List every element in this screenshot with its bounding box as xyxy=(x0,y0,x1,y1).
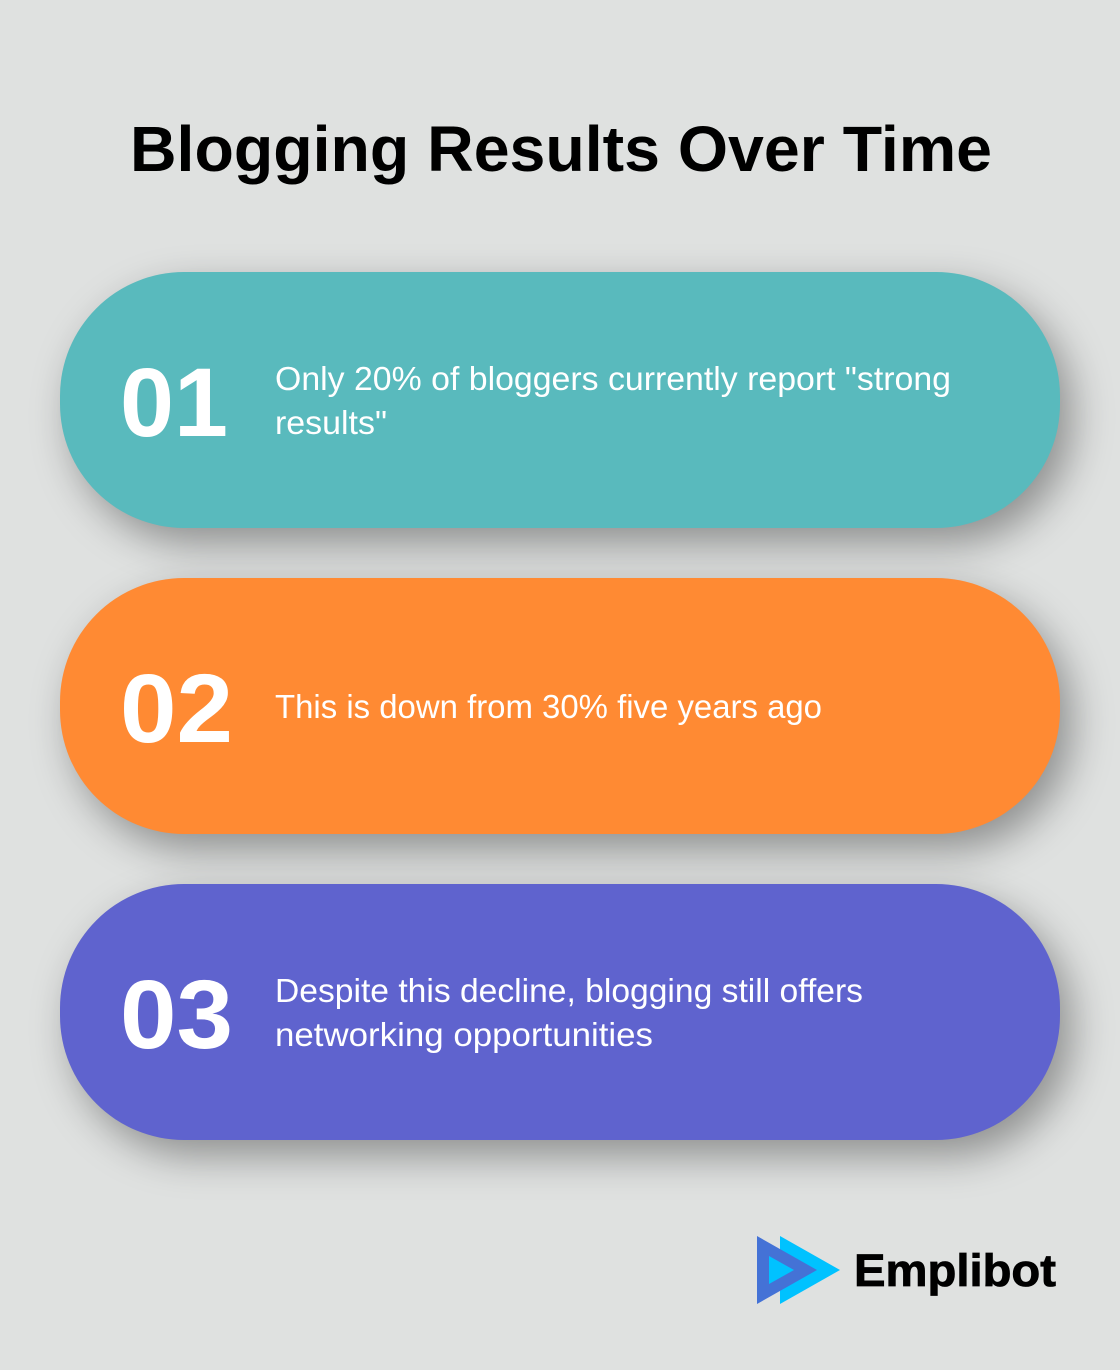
card 02 content xyxy=(120,654,822,763)
panel: card 03 xyxy=(60,884,1060,1140)
text: card 03: Despite this decline, blogging still offers xyxy=(275,972,863,1009)
panel: card 02 xyxy=(60,578,1060,834)
text: card 03: networking opportunities xyxy=(275,1016,653,1053)
card 03 content xyxy=(120,960,863,1069)
icon: play triangles xyxy=(757,1236,840,1304)
number 01: 01 xyxy=(120,348,228,457)
text: card 01: Only 20% of bloggers currently report "strong xyxy=(275,360,951,397)
logo wordmark: Emplibot xyxy=(854,1245,1056,1296)
number 02: 02 xyxy=(120,654,233,763)
text: card 02: This is down from 30% five years ago xyxy=(275,688,822,725)
number 03: 03 xyxy=(120,960,233,1069)
logo: Emplibot xyxy=(757,1236,1056,1304)
title: Blogging Results Over Time xyxy=(130,113,992,185)
panel: card 01 xyxy=(60,272,1060,528)
text: card 01: results" xyxy=(275,404,387,441)
text: card 03 xyxy=(275,972,863,1053)
card 01 content xyxy=(120,348,951,457)
text: card 01 xyxy=(275,360,951,441)
